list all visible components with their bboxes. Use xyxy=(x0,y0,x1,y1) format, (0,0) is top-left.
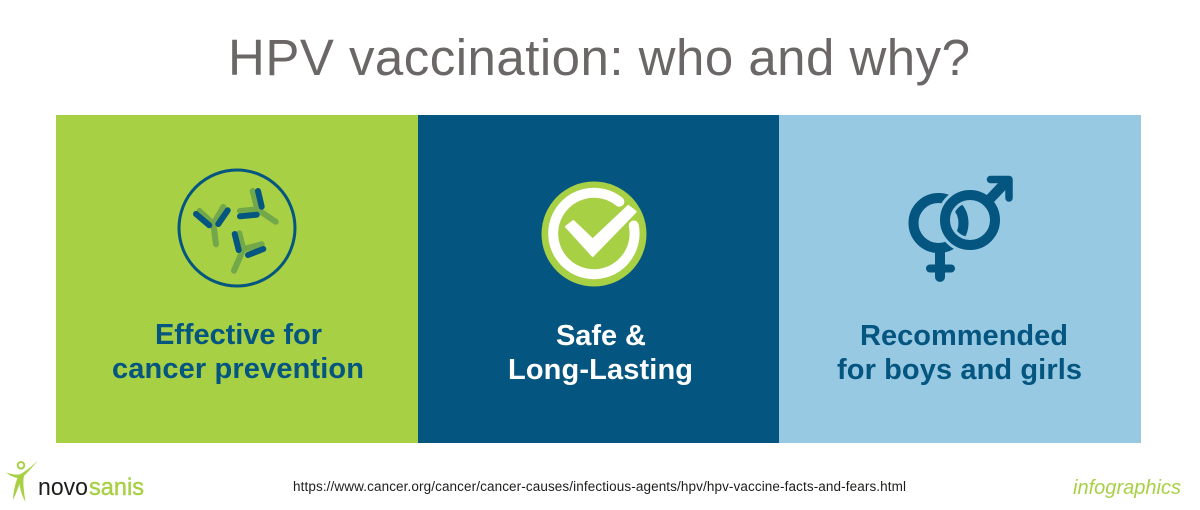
label: safe and long-lasting: Long-Lasting xyxy=(508,354,693,386)
label: recommended for boys and girls xyxy=(837,320,1082,386)
logo wordmark: sanis xyxy=(89,474,144,501)
logo wordmark xyxy=(38,474,144,501)
panel: effective for cancer prevention xyxy=(56,115,418,443)
title: HPV vaccination: who and why? xyxy=(228,29,970,86)
panel: recommended for boys and girls xyxy=(779,115,1141,443)
infographics tag: infographics xyxy=(1073,477,1181,499)
icon: logo figure xyxy=(6,460,38,502)
label: safe and long-lasting: Safe & xyxy=(556,320,646,352)
label: recommended for boys and girls: for boys and girls xyxy=(837,354,1082,386)
label: recommended for boys and girls: Recommended xyxy=(860,320,1068,352)
label: effective for cancer prevention: Effective for xyxy=(155,319,322,351)
icon: antibodies in circle xyxy=(179,170,295,286)
label: effective for cancer prevention: cancer prevention xyxy=(112,353,364,385)
logo wordmark: novo xyxy=(38,474,88,501)
label: safe and long-lasting xyxy=(508,320,693,386)
icon: male and female symbols xyxy=(914,180,1009,277)
label: effective for cancer prevention xyxy=(112,319,364,385)
logo: novosanis xyxy=(6,460,144,502)
source url: https://www.cancer.org/cancer/cancer-causes/infectious-agents/hpv/hpv-vaccine-facts-and-fears.html xyxy=(293,479,906,494)
panel: safe and long-lasting xyxy=(418,115,779,443)
icon: check mark badge xyxy=(542,182,646,286)
